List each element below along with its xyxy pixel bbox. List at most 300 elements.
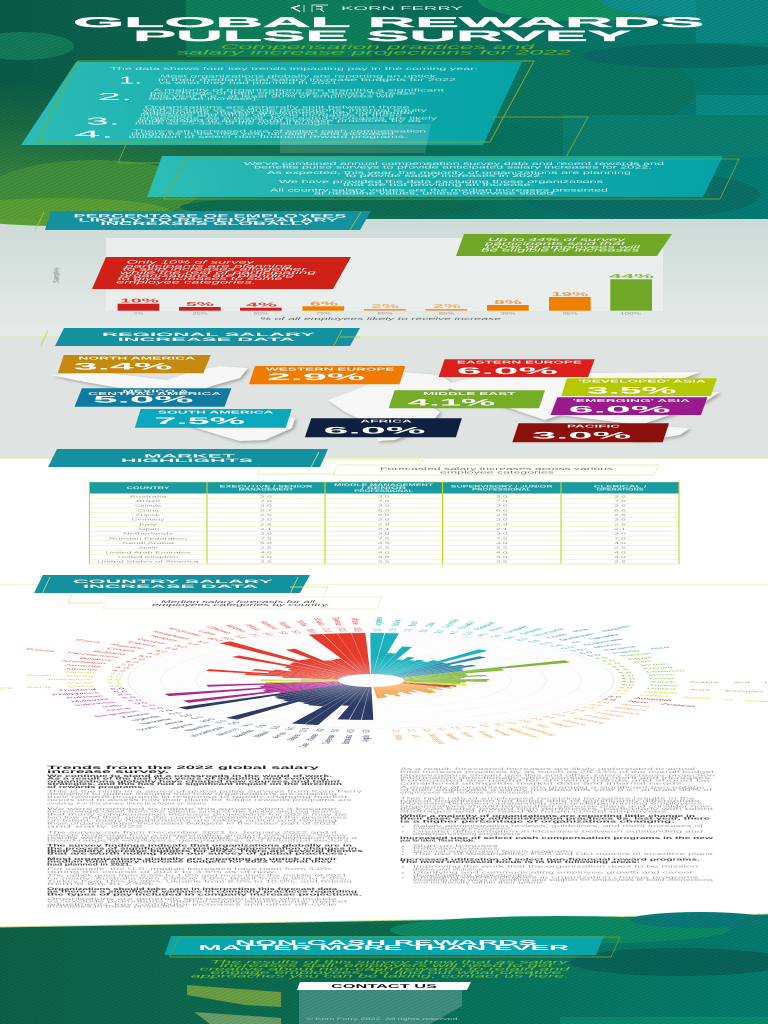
text block: trends left column: during the course of 2021 to 3.5% as of now. bbox=[47, 870, 277, 874]
text block: trends left column: needs and to assess how their plans for future rewards programs are bbox=[47, 798, 352, 802]
card: Pacific: 3.0% bbox=[532, 430, 634, 441]
labels: Middle East: 4.0 Jordan bbox=[610, 663, 670, 668]
labels: Middle East: 4.0 Oman bbox=[619, 674, 676, 677]
labels: Middle East: 4.0 Iraq bbox=[605, 660, 652, 665]
text block: trends left column: broad range of employers, geographies, and industrial sectors. bbox=[47, 839, 352, 843]
callout: green: Up to 44% of survey bbox=[488, 237, 627, 242]
labels: Western Europe: 3.0 Denmark bbox=[578, 706, 643, 715]
labels: Eastern Europe: Croatia 4.0 bbox=[104, 647, 162, 655]
labels: Mexico and Central America: 5.0 Costa Rica bbox=[526, 628, 592, 643]
bullet list two: Retention bonuses bbox=[413, 847, 499, 851]
trend 3: understated to actual total increase practices by as bbox=[137, 118, 421, 123]
country names: United States of America bbox=[97, 560, 200, 564]
x axis labels: 100% bbox=[620, 312, 643, 316]
labels: North America: 3.0 Canada bbox=[614, 690, 680, 694]
text block: trends left column: We continue to stand at a crossroads in the world of work. bbox=[47, 774, 332, 778]
footer background with currency shapes bbox=[0, 912, 768, 1024]
labels: Eastern Europe: Azerbaijan 7.0 bbox=[59, 660, 135, 666]
column: middle management values: 3.0 bbox=[378, 555, 390, 559]
card: Mexico and Central America: CENTRAL AMERICA bbox=[88, 391, 222, 396]
chart caption: Median salary forecasts for all bbox=[161, 599, 315, 604]
trend 1 bbox=[119, 74, 458, 86]
bars: Pacific bbox=[370, 680, 457, 687]
country names bbox=[97, 494, 200, 564]
trend 2 bbox=[97, 88, 447, 103]
labels: Africa: Cote d'Ivoire 4.0 bbox=[298, 729, 328, 748]
table header: MANAGEMENT bbox=[238, 488, 295, 492]
labels: Eastern Europe: Bosnia Herzegovina 5.0 bbox=[24, 648, 147, 661]
labels: Western Europe: 2.5 Luxembourg bbox=[503, 721, 558, 736]
column: supervisory values: 6.0 bbox=[496, 508, 508, 512]
bullet list one: lower-salary increases. bbox=[413, 827, 513, 831]
card: South America: SOUTH AMERICA bbox=[158, 410, 274, 415]
trend 1: Most organizations globally are reporting an uptick bbox=[160, 74, 439, 78]
panel: four key trends bbox=[21, 61, 534, 153]
bar value labels: 6% bbox=[310, 301, 338, 307]
trend 1: 1. bbox=[119, 75, 142, 86]
labels: Middle East: 8.0 Bahrain bbox=[593, 652, 654, 660]
text block: trends left column: median total salary increase budgets for 2022 vs what they bbox=[47, 860, 332, 864]
bars: Africa bbox=[178, 679, 378, 725]
column: executive / senior management values: 3.0 bbox=[260, 532, 273, 536]
x axis labels: 95% bbox=[562, 312, 579, 316]
bar value labels: 2% bbox=[433, 304, 461, 310]
labels: Eastern Europe: Estonia 5.0 bbox=[125, 641, 180, 650]
x axis labels: % of all employees likely to receive increase bbox=[260, 316, 503, 321]
text block: trends left column: that many compensation increase projections for 2022 may be bbox=[47, 813, 347, 817]
labels: Western Europe: 3.0 Netherlands bbox=[490, 723, 540, 738]
text block: trends left column: designed to gather insights into how organizations are adapting bbox=[47, 792, 337, 796]
bars: North America bbox=[370, 680, 468, 686]
bar chart: share of employees bbox=[51, 234, 672, 321]
labels: Mexico and Central America: 5.0 Mexico bbox=[568, 643, 624, 652]
labels: Western Europe: 3.0 Sweden bbox=[434, 728, 462, 740]
labels: Eastern Europe: Kazakhstan 5.0 bbox=[149, 631, 211, 644]
text block: trends left column: The uptick goes from 0.5% to 1.0% and more than the middle of 2021 bbox=[47, 874, 347, 878]
labels: Eastern Europe: Russia 5.0 bbox=[275, 622, 303, 634]
labels: Africa: Mauritius 5.0 bbox=[230, 725, 270, 738]
labels: Middle East: 4.0 United Arab Emirates bbox=[618, 687, 765, 693]
table: market highlights bbox=[89, 482, 679, 564]
column: middle management values: 3.5 bbox=[378, 560, 390, 564]
column: clerical values: 3.0 bbox=[614, 518, 627, 522]
column: middle management values: 4.0 bbox=[378, 550, 390, 554]
bar value labels bbox=[120, 274, 654, 310]
text block: trends right column: This high rate of employees receiving increases results in the bbox=[400, 796, 695, 800]
column: executive / senior management values: 3.5 bbox=[260, 560, 273, 564]
labels: Middle East bbox=[593, 652, 768, 693]
labels: South America: 7.0 Bolivia bbox=[388, 620, 404, 632]
column: clerical values: 7.0 bbox=[614, 499, 627, 503]
column: middle management values: 3.0 bbox=[378, 518, 390, 522]
x axis labels: 25% bbox=[192, 312, 209, 316]
heading: market highlights: HIGHLIGHTS bbox=[121, 458, 257, 464]
labels: Developed Asia: Singapore 3.5 bbox=[47, 678, 122, 681]
text block: trends right column: Organizations should review their increase plans and consider how bbox=[400, 804, 711, 808]
panel: methodology note: We have provided the data excluding those organizations bbox=[279, 179, 605, 184]
text block: trends left column: reflects responses from a representative group of companies. Survey bbox=[47, 833, 348, 837]
labels: Mexico and Central America: 5.0 Dominican Republic bbox=[538, 625, 634, 645]
bar chart: share of employees: Samples bbox=[51, 268, 60, 283]
column: supervisory values bbox=[496, 494, 508, 564]
column: executive / senior management values: 4.0 bbox=[260, 550, 273, 554]
column: middle management values: 2.8 bbox=[378, 522, 390, 526]
column: supervisory values: 2.5 bbox=[496, 513, 508, 517]
country names: Italy bbox=[139, 522, 158, 526]
labels: Africa: Malawi 6.0 bbox=[251, 726, 284, 738]
table header: PROFESSIONAL bbox=[354, 489, 415, 493]
heading: regional salary increase data bbox=[41, 328, 360, 347]
button: contact us bbox=[297, 982, 471, 990]
column: supervisory values: 3.0 bbox=[496, 504, 508, 508]
country names: Japan bbox=[137, 527, 160, 531]
text block: trends left column: the types of pay included in company increase projections. bbox=[47, 893, 362, 897]
column: middle management values: 4.5 bbox=[378, 541, 390, 545]
labels: Eastern Europe bbox=[24, 617, 363, 672]
text block: trends left column: that are worth noting from our survey of global practices: bbox=[47, 852, 347, 856]
labels: Eastern Europe: Georgia 8.0 bbox=[134, 638, 189, 648]
column: supervisory values: 3.5 bbox=[496, 560, 508, 564]
column: executive / senior management values: 2.5 bbox=[260, 513, 273, 517]
text block: trends right column: information directionally when considering merit and increases. bbox=[400, 776, 713, 780]
labels: Eastern Europe: Slovenia 10.0 bbox=[329, 617, 348, 632]
text block: trends left column: Most organizations globally are reporting an uptick in their bbox=[47, 857, 339, 861]
heading: regional salary increase data: INCREASE DATA bbox=[118, 337, 298, 343]
text block: trends left column: their salary increase budgets for 2022. There are several themes bbox=[47, 849, 363, 853]
labels: Africa: Botswana 6.0 bbox=[341, 729, 357, 744]
labels: South America: 4.5 Peru bbox=[475, 627, 506, 637]
trend 1: vs what they had planned in 2021. bbox=[159, 80, 341, 85]
bars: South America bbox=[364, 633, 488, 681]
country names: Canada bbox=[135, 504, 162, 508]
text block: closing message: increases stall, employers will need to get bbox=[220, 963, 555, 969]
column: middle management values bbox=[378, 494, 390, 564]
chart caption bbox=[103, 597, 382, 609]
labels: Western Europe bbox=[389, 701, 652, 744]
x axis labels: 80% bbox=[378, 312, 394, 316]
labels: Africa: Cameroon 3.0 bbox=[321, 729, 342, 744]
labels: Africa: Uganda 5.0 bbox=[129, 712, 185, 722]
title bbox=[73, 14, 704, 45]
text block: trends left column: Organizations should take care in interpreting this forecast data bbox=[47, 887, 340, 891]
column: clerical values: 2.1 bbox=[614, 527, 627, 531]
callout: green: 100% of employees will bbox=[483, 244, 643, 249]
text block: trends left column: vs. exclude promotions, internal equity adjustments, market bbox=[47, 900, 347, 904]
column: clerical values: 2.5 bbox=[614, 513, 627, 517]
labels: Africa: South Africa 6.0 bbox=[134, 716, 206, 731]
text block: trends left column: For example, the U.S. median increases have risen from 3.0% bbox=[47, 867, 334, 871]
labels: Middle East: 4.0 Qatar bbox=[621, 677, 675, 680]
card: Mexico and Central America: 5.0% bbox=[93, 395, 196, 406]
x axis labels: 85% bbox=[439, 312, 456, 316]
callout: green: participants said that bbox=[482, 241, 627, 246]
labels: Eastern Europe: Bulgaria 5.0 bbox=[90, 650, 154, 658]
text block: closing message bbox=[191, 959, 570, 979]
labels: Emerging Asia: Thailand 5.0 bbox=[57, 687, 126, 692]
column: middle management values: 3.0 bbox=[378, 494, 390, 498]
country names: France bbox=[136, 513, 161, 517]
card: Developed Asia: 'DEVELOPED' ASIA bbox=[578, 379, 706, 384]
column: clerical values: 2.5 bbox=[614, 522, 627, 526]
labels: Africa: Morocco 4.0 bbox=[214, 723, 256, 736]
bullet list three bbox=[413, 865, 713, 885]
chart caption: employees categories by country. bbox=[152, 602, 331, 607]
labels: Eastern Europe: Romania 5.0 bbox=[256, 621, 290, 635]
column: executive / senior management values: 3.0 bbox=[260, 518, 273, 522]
column: supervisory values: 3.0 bbox=[496, 555, 508, 559]
labels: Western Europe: 2.5 Ireland bbox=[527, 718, 574, 728]
column: executive / senior management values: 7.5 bbox=[260, 536, 273, 540]
text block: closing message: engage employees. To find out what creative bbox=[210, 970, 562, 976]
bullet list three: Engaging with employees in organization change programs bbox=[413, 875, 699, 879]
text block: closing message: The results of this survey show that as salary bbox=[210, 959, 569, 965]
column: middle management values: 2.5 bbox=[378, 546, 390, 550]
bullet list two bbox=[413, 844, 714, 856]
text block: trends right column: is a higher percentage of organizations changing: bbox=[400, 819, 675, 823]
text block: trends left column: We were prompted to initiate this survey when it became bbox=[47, 807, 337, 811]
trend 3: adjustments, market adjustments, key contributor bbox=[142, 110, 416, 115]
labels: South America: 7.0 Brazil bbox=[403, 621, 421, 632]
trend 3: Organizations are generally split between those bbox=[145, 104, 412, 110]
region cards bbox=[58, 355, 717, 442]
column: clerical values: 3.0 bbox=[614, 504, 627, 508]
heading: country salary increase data: INCREASE DATA bbox=[83, 584, 260, 590]
text block: trends right column: increases between outstanding and underperforming employees. bbox=[400, 802, 705, 806]
x axis labels: 90% bbox=[500, 312, 517, 316]
text block: trends right column: As a result, forecasted increases are likely understated to actual bbox=[400, 767, 696, 771]
column: clerical values: 3.0 bbox=[614, 532, 627, 536]
heading: percentage of employees bbox=[35, 211, 371, 231]
text block: trends right column: A majority of organizations are granting a significant percentage bbox=[400, 785, 705, 789]
labels: Pacific: 3.0 New Zealand bbox=[600, 698, 697, 708]
labels: South America: 5.0 Chile bbox=[418, 622, 439, 633]
callout: green bbox=[456, 234, 672, 256]
callout: red: employee categories. bbox=[116, 279, 256, 284]
button: contact us: CONTACT US bbox=[331, 984, 438, 990]
labels: South America: 5.0 Uruguay bbox=[489, 626, 531, 638]
bullet list three: including new ways of working and support for employees to build connections bbox=[413, 878, 713, 882]
table header: / SENIOR bbox=[361, 486, 407, 490]
labels: Africa: Namibia 6.0 bbox=[183, 720, 230, 732]
column: executive / senior management values bbox=[260, 494, 273, 564]
bullet list two: The use of sustainability, ESG and DEI metrics in incentive plans bbox=[413, 852, 714, 856]
text block: trends right column: Increased utilization of select non-financial reward programs. bbox=[400, 857, 700, 861]
text block: trends left column: Organizations are generally split between those who include bbox=[47, 897, 337, 901]
bullet list three: driven and inclusive bbox=[413, 867, 483, 871]
labels: Eastern Europe: Serbia 10.0 bbox=[293, 620, 318, 633]
labels: Eastern Europe: Moldova 7.0 bbox=[222, 625, 262, 637]
column: executive / senior management values: 5.0 bbox=[260, 541, 273, 545]
radial chart: median salary forecast by country bbox=[0, 617, 768, 748]
labels: South America bbox=[373, 617, 567, 641]
heading: market highlights bbox=[48, 449, 423, 474]
column: middle management values: 7.0 bbox=[378, 499, 390, 503]
bullet list one: underperforming employees. bbox=[413, 832, 523, 836]
table header: CLERICAL / bbox=[594, 485, 646, 489]
text block: trends left column: strategies, and this has had a significant impact on the direction bbox=[47, 782, 342, 786]
country names: United Kingdom bbox=[118, 555, 179, 559]
labels: Africa: Tanzania 5.0 bbox=[138, 714, 196, 725]
callout: green: be eligible for increases bbox=[481, 248, 641, 253]
heading: percentage of employees: INCREASES GLOBALLY bbox=[100, 221, 316, 227]
bullet list three: Clarifying and communicating employee growth and career bbox=[413, 871, 695, 875]
table caption bbox=[333, 465, 659, 475]
labels: Western Europe: 2.5 France bbox=[560, 711, 614, 720]
card: South America: 7.5% bbox=[154, 416, 247, 427]
table caption: Forecasted salary increases across various bbox=[380, 466, 613, 471]
trend 4 bbox=[74, 128, 428, 140]
subtitle bbox=[176, 44, 572, 57]
heading: non-cash rewards bbox=[164, 936, 620, 957]
labels: Western Europe: 3.0 Austria bbox=[594, 701, 652, 708]
text block: trends right column: of their employees a salary increase this year (i.e., at least 90% of bbox=[400, 788, 712, 792]
labels: Middle East: 4.0 Turkey bbox=[620, 684, 679, 687]
bars bbox=[118, 279, 652, 311]
labels: Mexico and Central America: 5.0 Guatemala bbox=[559, 638, 626, 650]
country names: Australia bbox=[130, 494, 167, 498]
callout: red: organizations are planning bbox=[120, 273, 295, 278]
text block: trends right column: Forecasted are useful for showing trends and should be bbox=[400, 779, 710, 783]
column: supervisory values: 7.5 bbox=[496, 536, 508, 540]
panel: methodology note: at headline values, unless otherwise stated. bbox=[314, 191, 557, 196]
labels: Emerging Asia: Pakistan 8.0 bbox=[65, 693, 133, 699]
card: Africa: AFRICA bbox=[360, 419, 412, 424]
trend 2: A majority of organizations are granting a significant bbox=[153, 88, 447, 92]
table header: OPERATIONS bbox=[596, 488, 645, 492]
column: middle management values: 2.1 bbox=[378, 527, 390, 531]
column: supervisory values: 2.5 bbox=[496, 546, 508, 550]
callout: red: Only 10% of survey bbox=[126, 260, 256, 265]
labels: Eastern Europe: Kyrgyzstan 10.0 bbox=[165, 627, 225, 642]
column: executive / senior management values: 3.0 bbox=[260, 494, 273, 498]
column: clerical values: 2.5 bbox=[614, 546, 627, 550]
text block: trends left column: As a result of the last two years of adapting and evolving, bbox=[47, 777, 329, 781]
card: Middle East bbox=[389, 390, 545, 408]
labels: Emerging Asia: Bangladesh 5.0 bbox=[92, 707, 166, 718]
trend 3: much as 25-33% of the overall budget. bbox=[135, 121, 333, 126]
labels: Africa bbox=[119, 709, 373, 748]
section title: Trends from the 2022 global salary bbox=[47, 765, 320, 771]
labels: Mexico and Central America bbox=[526, 625, 672, 657]
heading: market highlights: MARKET bbox=[144, 453, 235, 459]
text block: trends right column: Increased use of select cash compensation programs in the new bbox=[400, 836, 714, 840]
subtitle: Compensation practices and bbox=[221, 44, 536, 51]
subtitle: salary increase projections for 2022 bbox=[176, 50, 572, 57]
country names: China bbox=[137, 508, 160, 512]
card: Africa bbox=[305, 418, 462, 437]
labels: Africa: Zambia 7.0 bbox=[119, 709, 175, 718]
text block: trends right column: their base salary administration practices vs. last year, there bbox=[400, 817, 710, 821]
bar value labels: 2% bbox=[371, 304, 399, 310]
text block: trends right column: total increase practices by as much as 25-33% of the overall budget. bbox=[400, 770, 717, 774]
column: executive / senior management values: 5.7 bbox=[260, 508, 273, 512]
labels: Mexico and Central America: 5.0 Panama bbox=[577, 646, 639, 655]
text block: trends left column: This is the ninth in a series of global pulse surveys from Korn Ferry bbox=[47, 789, 363, 793]
text block: trends right column bbox=[400, 767, 717, 885]
text block: trends right column: considered alongside market data and internal needs. bbox=[400, 781, 685, 785]
text block: trends left column: as there is a significant variance in company practices regarding bbox=[47, 890, 357, 894]
text block: trends left column: their rewards programs in response to rapidly changing market bbox=[47, 795, 347, 799]
card: Eastern Europe: 6.0% bbox=[457, 366, 560, 377]
labels: Eastern Europe: Poland 5.0 bbox=[241, 624, 275, 636]
trend 4: utilization of select non-financial reward programs. bbox=[128, 134, 408, 139]
column: middle management values: 2.5 bbox=[378, 513, 390, 517]
labels: Eastern Europe: Hungary 5.0 bbox=[147, 635, 201, 646]
labels: Africa: Nigeria 10.0 bbox=[168, 718, 218, 730]
heading: percentage of employees: PERCENTAGE OF EMPLOYEES bbox=[74, 213, 350, 219]
labels: Western Europe: 3.0 Greece bbox=[539, 715, 590, 726]
section title bbox=[47, 765, 320, 775]
bullet list two: Special spot/project bonus programs bbox=[413, 849, 574, 853]
text block: trends left column: evolving. For this survey, there is a focus on salary. bbox=[47, 801, 207, 805]
country names: Brazil bbox=[136, 499, 161, 503]
bullet list three: and inclusivity within their teams bbox=[413, 881, 543, 885]
text block: trends left column: had planned in 2021. bbox=[47, 862, 132, 866]
labels: Africa: Kenya 6.0 bbox=[270, 727, 298, 738]
labels: Emerging Asia: Philippines 5.0 bbox=[51, 690, 129, 696]
bars: Emerging Asia bbox=[165, 679, 374, 703]
card: Middle East: MIDDLE EAST bbox=[423, 391, 517, 396]
trend 3 bbox=[86, 104, 440, 128]
labels: South America: 5.0 Colombia bbox=[433, 619, 462, 633]
column: clerical values: 6.0 bbox=[614, 508, 627, 512]
labels: South America: 5.0 Paraguay bbox=[461, 622, 499, 635]
labels: Western Europe: 2.5 Norway bbox=[476, 724, 514, 736]
labels: South America: 5.0 Argentina bbox=[373, 617, 385, 631]
text block: trends left column: for nearly: Australia from 2.5% to 3.0%, Brazil from 5.0% to 7.0%, bbox=[47, 876, 347, 880]
text block: trends right column: shortages and the need to retain critical employees. bbox=[400, 810, 670, 814]
text block: trends right column: While a majority of organizations are reporting little change in bbox=[400, 814, 695, 818]
card: Emerging Asia bbox=[550, 397, 707, 415]
table header bbox=[89, 482, 679, 494]
column: middle management values: 3.0 bbox=[378, 504, 390, 508]
trend 2: receive an increase). bbox=[148, 96, 260, 101]
labels: Western Europe: 3.0 Belgium bbox=[587, 704, 649, 712]
card: Eastern Europe bbox=[439, 359, 595, 377]
bars: Western Europe bbox=[368, 680, 453, 698]
text block: trends right column: year for talent. These include: bbox=[400, 839, 475, 843]
callout: red: to skip increases altogether bbox=[122, 267, 308, 272]
column: executive / senior management values: 2.1 bbox=[260, 527, 273, 531]
trend 1: in their median total salary increase budgets for 2022 bbox=[158, 77, 458, 82]
column: supervisory values: 3.0 bbox=[496, 494, 508, 498]
text block: trends left column: The survey findings indicate that organizations globally are in bbox=[47, 844, 352, 848]
bars: Developed Asia bbox=[261, 679, 371, 683]
labels: Eastern Europe: Czech Republic 4.0 bbox=[73, 639, 170, 653]
world map bbox=[51, 366, 720, 441]
trend 2: 2. bbox=[97, 92, 133, 103]
title: PULSE SURVEY bbox=[133, 28, 631, 45]
labels: Middle East: 7.0 Egypt bbox=[600, 656, 654, 663]
bullet list three: Improving the work that the organization does to be mission bbox=[413, 865, 698, 869]
trend 4: programs in the new year for talent, and increased bbox=[131, 131, 396, 136]
labels: Western Europe: 2.0 Switzerland bbox=[419, 728, 447, 744]
table header: EXECUTIVE / SENIOR bbox=[220, 485, 313, 489]
callout: red: to give increases to some bbox=[118, 276, 284, 281]
labels: Eastern Europe: Albania 4.0 bbox=[64, 668, 127, 672]
bars: Mexico and Central America bbox=[368, 656, 486, 681]
labels: Western Europe: 3.0 Malta bbox=[389, 729, 405, 740]
labels: Middle East: 4.0 Lebanon bbox=[617, 670, 686, 674]
card: Western Europe: WESTERN EUROPE bbox=[266, 366, 395, 371]
text block: trends left column: Turkey from 15% to 20%, Ukraine from 8.0% to 10.0%, and Russia bbox=[47, 879, 352, 883]
labels: Emerging Asia: Malaysia 5.0 bbox=[70, 696, 138, 703]
panel: methodology note: We've combined annual compensation survey data and recent rewards and bbox=[244, 161, 666, 166]
card: Emerging Asia: 6.0% bbox=[569, 404, 673, 415]
labels: Emerging Asia: China 6.0 bbox=[105, 704, 158, 712]
logo: Korn Ferry: KORN FERRY bbox=[341, 6, 465, 12]
table header: MIDDLE MANAGEMENT bbox=[334, 483, 435, 487]
